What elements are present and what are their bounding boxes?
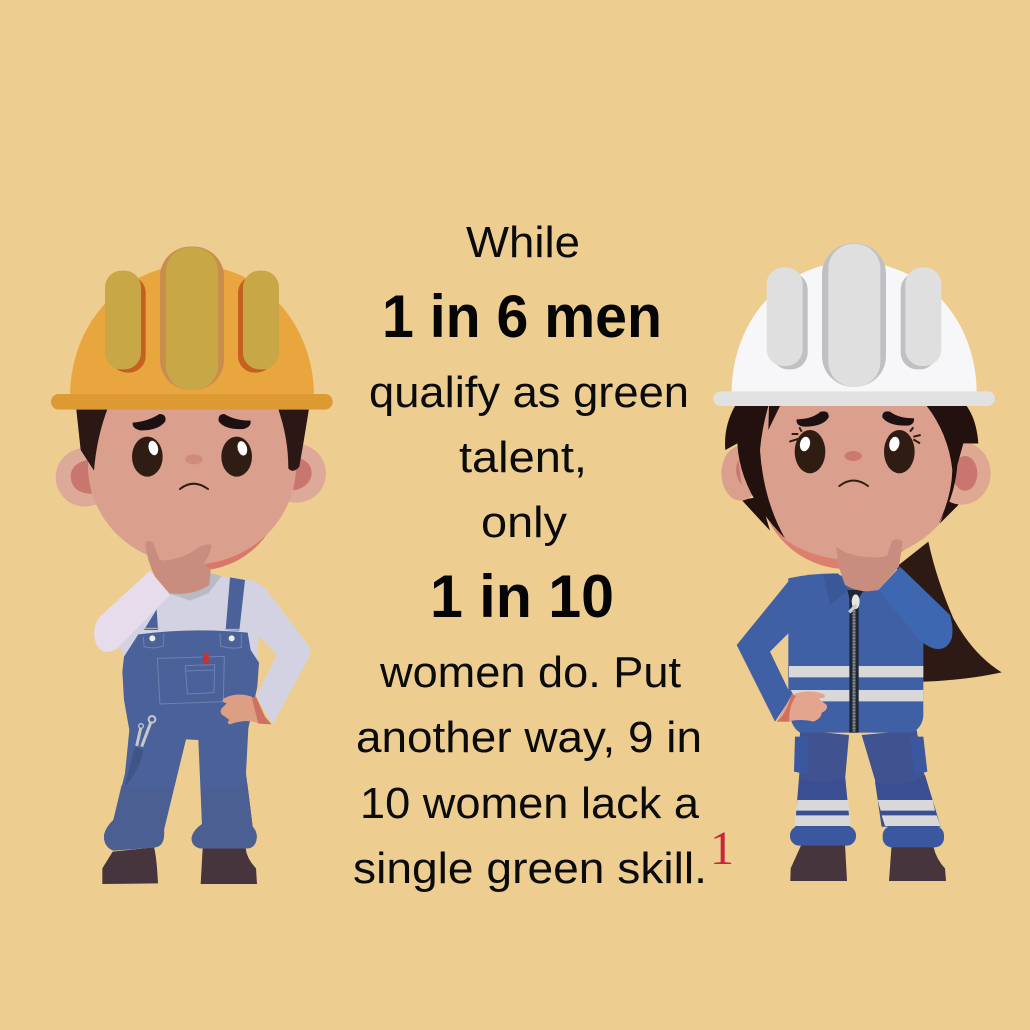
text: 1 in 10: 1 in 10 xyxy=(430,563,614,630)
man white shirt xyxy=(117,576,311,724)
woman jacket collar xyxy=(823,573,848,605)
man overall straps xyxy=(144,577,245,631)
man overall pockets xyxy=(143,628,241,704)
woman nose xyxy=(845,451,862,461)
text: While: While xyxy=(466,218,580,267)
woman mouth xyxy=(839,480,868,486)
icon: wrenches in pocket xyxy=(137,716,155,747)
woman shoes xyxy=(790,844,946,881)
man nose xyxy=(185,454,203,464)
text: qualify as green talent, xyxy=(369,368,689,482)
woman hand on chin xyxy=(836,539,903,591)
woman chin shadow xyxy=(760,397,937,569)
man eyes xyxy=(132,437,252,477)
woman hand on hip xyxy=(777,691,827,722)
woman jacket reflective stripes xyxy=(789,666,923,701)
man head and helmet xyxy=(51,247,333,571)
man helmet brim xyxy=(51,394,333,410)
man lower leg shade xyxy=(104,783,257,851)
woman helmet brim xyxy=(713,391,995,406)
man ears xyxy=(56,444,326,507)
man raised arm and chin hand xyxy=(94,541,212,652)
woman eyes xyxy=(789,427,921,473)
man face xyxy=(88,367,296,565)
woman helmet ridges xyxy=(767,243,941,387)
woman back hair xyxy=(742,406,978,531)
man chin shadow xyxy=(110,396,283,571)
man hand on chin xyxy=(145,541,212,594)
man shirt collar xyxy=(168,572,222,601)
woman reflective leg stripes xyxy=(795,800,941,826)
text: qualify as green talent,: qualify as green xyxy=(369,368,689,417)
man raised sleeve xyxy=(94,571,170,652)
woman body and workwear xyxy=(737,573,946,881)
woman arm on hip xyxy=(737,577,792,722)
man hand on hip xyxy=(221,695,272,724)
text: 1 in 6 men: 1 in 6 men xyxy=(382,283,662,350)
text: women do, put another way: women do. Put xyxy=(379,648,681,697)
woman lower legs xyxy=(795,775,941,827)
woman raised sleeve xyxy=(878,567,953,649)
text: only: only xyxy=(481,498,567,547)
woman face xyxy=(760,406,952,560)
man helmet ridges xyxy=(105,247,279,390)
woman front hair strands xyxy=(725,406,978,538)
text: women do, put another way xyxy=(353,648,707,893)
man mouth xyxy=(180,484,208,489)
man helmet dome xyxy=(70,265,314,397)
text: qualify as green talent,: talent, xyxy=(459,433,587,482)
woman raised arm and chin hand xyxy=(836,539,953,649)
man body and overalls xyxy=(102,572,311,884)
footnote marker: 1 xyxy=(710,822,734,875)
man leg pocket xyxy=(125,747,143,786)
woman trousers xyxy=(795,730,941,827)
man overall buttons xyxy=(149,635,235,641)
man shoes xyxy=(102,847,257,884)
man eyebrows xyxy=(133,414,251,430)
man red pencil xyxy=(203,654,209,664)
woman ears xyxy=(721,442,991,505)
text: women do, put another way: another way, 9 in xyxy=(356,713,702,762)
man hair xyxy=(76,407,309,471)
woman jacket xyxy=(788,573,923,733)
woman eyebrows xyxy=(797,411,914,427)
text: women do, put another way: 10 women lack a xyxy=(360,779,700,828)
text: women do, put another way: single green skill. xyxy=(353,844,707,893)
character: woman in white hard hat xyxy=(713,243,1002,881)
central statistic text xyxy=(353,218,734,893)
man overalls xyxy=(104,630,259,851)
woman helmet dome xyxy=(732,262,977,393)
woman ponytail xyxy=(897,542,1002,682)
woman leg pockets xyxy=(794,737,927,775)
character: man in yellow hard hat xyxy=(51,247,333,884)
woman trouser cuffs xyxy=(790,826,944,847)
woman zipper xyxy=(847,590,864,733)
woman head and helmet xyxy=(713,243,995,569)
